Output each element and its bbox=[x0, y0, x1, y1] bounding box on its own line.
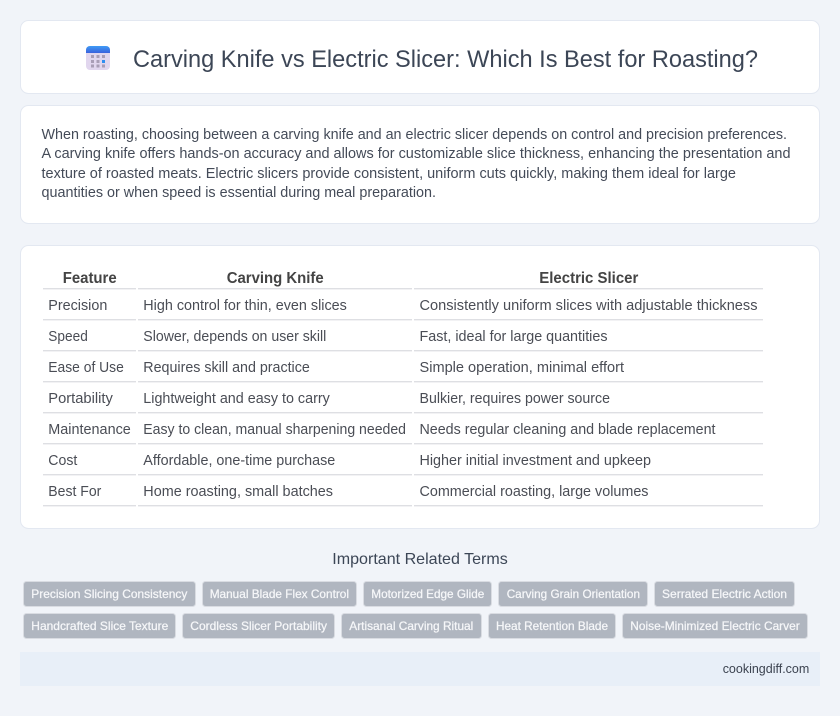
tag list: related terms: Precision Slicing Consistency bbox=[31, 587, 187, 601]
row: speed: Fast, ideal for large quantities bbox=[420, 329, 608, 345]
text block: introduction paragraph: A carving knife offers hands-on accuracy and allows for customizable slice thickness, enhancing the presentation and bbox=[42, 146, 790, 162]
footer: cookingdiff.com bbox=[723, 661, 809, 676]
tag list: related terms: Serrated Electric Action bbox=[662, 587, 787, 601]
table header: Electric Slicer bbox=[539, 270, 638, 287]
row: speed bbox=[48, 329, 608, 345]
panel: header bbox=[20, 20, 820, 94]
tag list: related terms: Motorized Edge Glide bbox=[371, 587, 485, 601]
row: ease of use: Simple operation, minimal effort bbox=[420, 360, 624, 376]
tag list: related terms bbox=[24, 582, 808, 638]
tag list: related terms: Carving Grain Orientation bbox=[507, 587, 640, 601]
text block: introduction paragraph: When roasting, choosing between a carving knife and an electric slicer depends on control and precision preferences. bbox=[42, 127, 787, 143]
row: maintenance bbox=[48, 422, 716, 438]
tag list: related terms: Artisanal Carving Ritual bbox=[349, 619, 473, 633]
row: best for: Commercial roasting, large volumes bbox=[420, 484, 648, 500]
row: best for bbox=[48, 484, 649, 500]
row: precision: High control for thin, even slices bbox=[143, 298, 347, 314]
text block: introduction paragraph: texture of roasted meats. Electric slicers provide consistent, uniform cuts quickly, making them ideal for large bbox=[42, 166, 736, 182]
row: cost: Cost bbox=[48, 453, 77, 469]
row: precision: Consistently uniform slices with adjustable thickness bbox=[420, 298, 758, 314]
tag list: related terms: Noise-Minimized Electric Carver bbox=[630, 619, 800, 633]
row: maintenance: Easy to clean, manual sharpening needed bbox=[143, 422, 406, 438]
text block: introduction paragraph bbox=[42, 127, 790, 201]
row: best for: Home roasting, small batches bbox=[143, 484, 333, 500]
row: speed: Speed bbox=[48, 329, 88, 345]
row: precision: Precision bbox=[48, 298, 107, 314]
heading: important related terms: Important Related Terms bbox=[332, 551, 508, 568]
row: portability: Portability bbox=[48, 391, 114, 407]
row: maintenance: Maintenance bbox=[48, 422, 131, 438]
row: precision bbox=[48, 298, 758, 314]
row: cost: Affordable, one-time purchase bbox=[143, 453, 335, 469]
panel: introduction bbox=[20, 106, 820, 224]
tag list: related terms: Handcrafted Slice Texture bbox=[31, 619, 169, 633]
row: portability: Lightweight and easy to carry bbox=[143, 391, 331, 407]
table header: Carving Knife bbox=[227, 270, 324, 287]
table header: Feature bbox=[63, 270, 117, 287]
row: ease of use: Requires skill and practice bbox=[143, 360, 310, 376]
row: portability bbox=[48, 391, 610, 407]
row: best for: Best For bbox=[48, 484, 101, 500]
row: ease of use bbox=[48, 360, 624, 376]
row: portability: Bulkier, requires power source bbox=[420, 391, 610, 407]
title: Carving Knife vs Electric Slicer: Which Is Best for Roasting? bbox=[133, 46, 758, 73]
icon: calendar bbox=[86, 46, 110, 70]
text block: introduction paragraph: quantities or when speed is essential during meal preparation. bbox=[42, 185, 436, 201]
table header bbox=[63, 270, 638, 287]
tag list: related terms: Manual Blade Flex Control bbox=[210, 587, 349, 601]
row: cost bbox=[48, 453, 651, 469]
footer bbox=[20, 652, 820, 686]
row: maintenance: Needs regular cleaning and blade replacement bbox=[420, 422, 716, 438]
tag list: related terms: Cordless Slicer Portability bbox=[190, 619, 327, 633]
row: cost: Higher initial investment and upkeep bbox=[420, 453, 651, 469]
panel: comparison table bbox=[20, 246, 820, 528]
row: ease of use: Ease of Use bbox=[48, 360, 124, 376]
tag list: related terms: Heat Retention Blade bbox=[496, 619, 608, 633]
row: speed: Slower, depends on user skill bbox=[143, 329, 326, 345]
